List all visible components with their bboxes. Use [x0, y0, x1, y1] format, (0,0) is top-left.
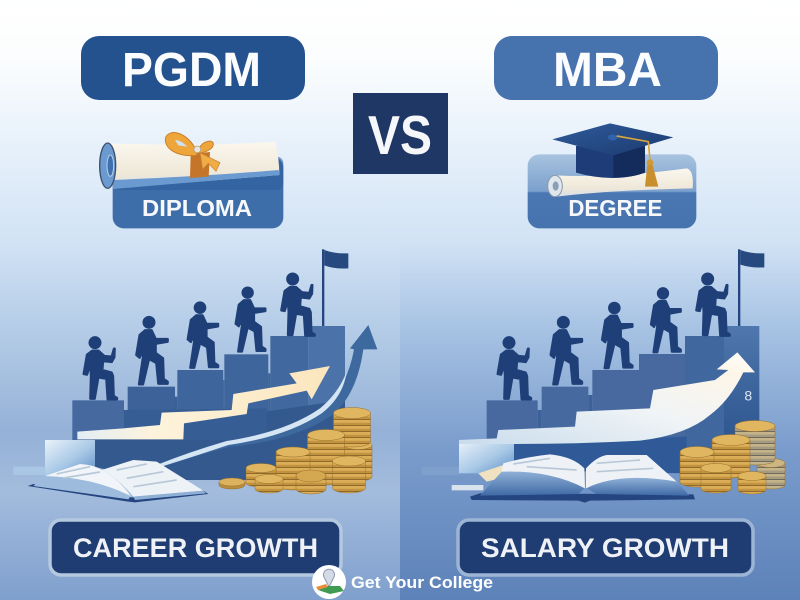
icon: open book: [28, 460, 208, 502]
arrow: blue curve: [157, 325, 377, 467]
left illustration: career growth: [13, 249, 377, 502]
light base block: [13, 440, 95, 475]
label: salary growth: SALARY GROWTH: [481, 533, 729, 563]
icon: open book: [452, 454, 695, 503]
heading: PGDM: PGDM: [122, 44, 261, 97]
diploma badge: [100, 133, 283, 228]
chart: staircase: [72, 326, 345, 480]
background: left panel: [0, 0, 400, 600]
people climbing: [498, 274, 730, 399]
label: career growth: [50, 520, 341, 575]
VS badge: VS: [368, 104, 432, 166]
icon: gold coins: [219, 407, 372, 494]
light base block: [422, 442, 514, 475]
icon: logo badge: [312, 565, 346, 599]
degree badge: [528, 123, 696, 228]
icon: gold coins: [680, 420, 785, 494]
right illustration: salary growth: [422, 249, 785, 503]
degree label box: [528, 154, 696, 228]
VS badge: [353, 93, 448, 174]
icon: flag: [738, 249, 764, 326]
icon: rolled diploma: [100, 133, 279, 189]
arrow: cream stepped arrow: [77, 366, 330, 439]
icon: orange ribbon: [190, 152, 210, 178]
icon: rolled degree scroll: [548, 168, 693, 197]
heading: MBA: [494, 36, 718, 100]
label: career growth: CAREER GROWTH: [73, 533, 318, 563]
degree label box: DEGREE: [568, 195, 662, 221]
arrow: white rising arrow: [459, 352, 755, 444]
logo: Get Your College: Get Your College: [351, 573, 493, 592]
label: salary growth: [458, 520, 753, 575]
diploma label box: [113, 157, 283, 228]
logo: Get Your College: [312, 565, 493, 599]
icon: graduation cap: [552, 123, 673, 187]
people climbing: [84, 274, 315, 399]
chart: staircase: [487, 326, 759, 473]
icon: flag: [322, 249, 348, 326]
background: right panel: [400, 0, 800, 600]
text mark on stair: 8: [744, 388, 752, 404]
diploma label box: DIPLOMA: [142, 195, 252, 221]
heading: MBA: MBA: [553, 44, 662, 97]
heading: PGDM: [81, 36, 305, 100]
